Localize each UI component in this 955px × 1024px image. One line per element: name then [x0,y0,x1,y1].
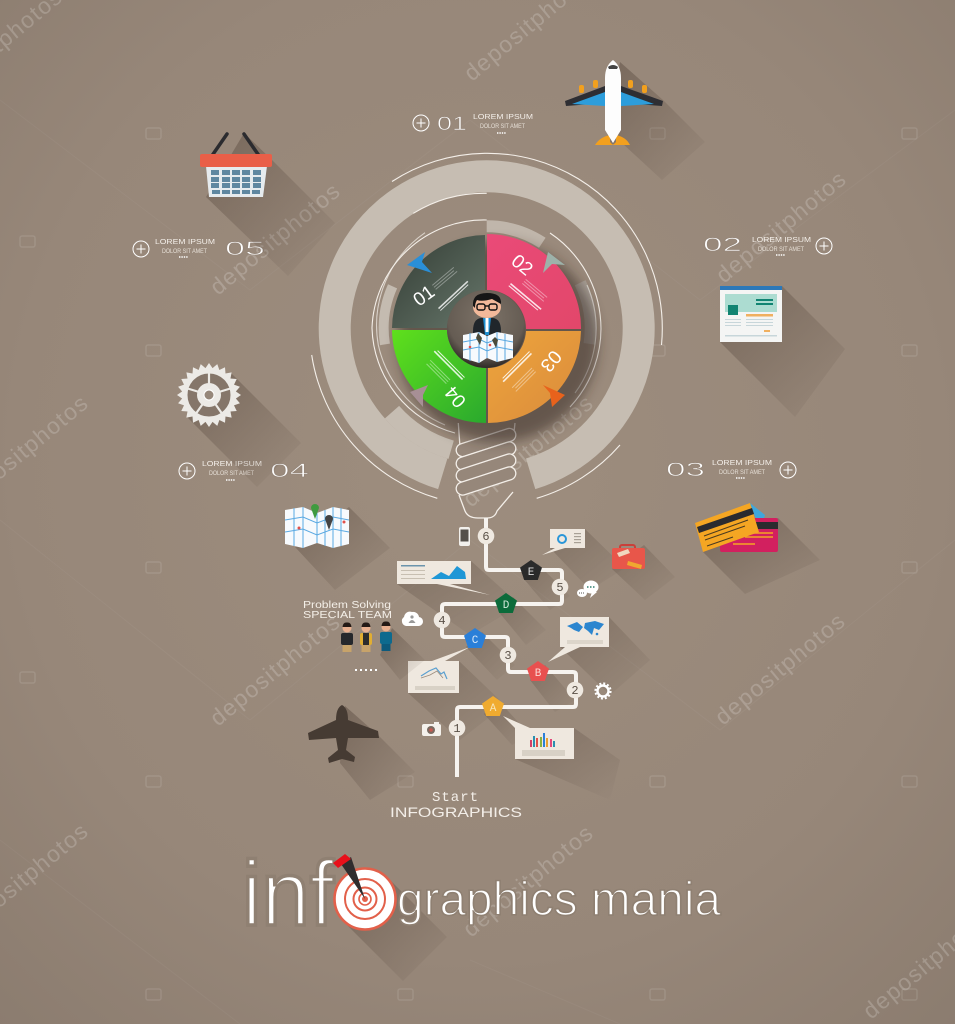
label 04: DOLOR SIT AMET [209,470,254,477]
label 01 [413,114,533,135]
step markers: 2 [571,684,579,698]
label 01: LOREM IPSUM [473,114,533,121]
title: inf [242,843,334,945]
icon: credit cards [695,503,820,594]
icon: gear [177,363,301,487]
label 01: 01 [437,114,467,135]
bulb graphic [312,153,662,518]
icon: shopping basket [200,133,335,276]
step markers: 1 [453,722,461,736]
step markers: 6 [482,530,490,544]
centre hole [447,290,525,368]
icon: gear small [595,683,611,699]
watermark: depositphotos [710,608,849,730]
info card: line chart [408,647,470,693]
icon: web page [720,286,845,417]
milestone pentagons: B [535,668,542,680]
bulb base [455,423,517,518]
team heading: SPECIAL TEAM [303,610,392,621]
team people [341,621,425,680]
team heading [303,600,392,621]
step markers [434,528,583,736]
watermark: depositphotos [711,166,850,288]
dots [355,669,378,671]
icon: camera [422,722,441,736]
icon: chat bubbles [577,580,598,598]
milestone pentagons: D [503,600,510,612]
label 05 [133,239,265,260]
start label: Start [432,790,478,806]
label 04 [179,461,310,482]
watermark: depositphotos [458,390,597,512]
title [242,843,722,981]
icon: airplane [565,60,705,180]
segment 01: 01 [410,282,439,311]
segment 03: 03 [536,346,565,375]
step markers: 4 [438,614,446,628]
label 04: LOREM IPSUM [202,461,262,468]
label 03: 03 [666,460,705,481]
label 02: LOREM IPSUM [752,237,811,244]
process route line [442,518,576,777]
thin arcs [312,153,662,498]
label 02 [703,235,832,256]
pie chart [392,234,598,442]
watermark: depositphotos [205,178,344,300]
icon: folded map [285,504,390,590]
icon: target with dart [333,854,396,930]
segment 03 [488,331,581,423]
info card: bar chart [503,716,574,759]
milestone pentagons [464,560,549,716]
label 05: LOREM IPSUM [155,239,215,246]
label 01: DOLOR SIT AMET [480,123,525,130]
watermark: depositphotos [205,609,344,731]
info card: world map [548,617,609,662]
segment 02: 02 [507,251,536,280]
arrow tabs [407,252,565,407]
milestone pentagons: A [490,703,497,715]
label 03 [666,460,796,481]
inner ring segments [379,220,597,459]
title: graphics mania [397,872,722,925]
route path shadows [397,529,675,800]
segment 02 [487,234,581,329]
team heading: Problem Solving [303,600,391,611]
label 05: DOLOR SIT AMET [162,248,207,255]
label 03: LOREM IPSUM [712,460,772,467]
man with map [463,293,513,363]
icon: phone [459,527,470,546]
info card: area chart [397,561,490,595]
label 02: DOLOR SIT AMET [758,246,804,253]
start label: INFOGRAPHICS [390,805,522,820]
label 05: 05 [225,239,265,260]
milestone pentagons: C [472,635,479,647]
segment 04: 04 [441,381,471,411]
label 02: 02 [703,235,742,256]
info card: ring chart [542,529,585,555]
milestone pentagons: E [528,567,535,579]
label 04: 04 [270,461,310,482]
step markers: 3 [504,649,512,663]
icon: plane silhouette [308,705,415,800]
icon: suitcase [612,545,645,569]
big ring [319,160,655,489]
icon: cloud [402,612,423,626]
segment 01 [392,235,485,328]
label 03: DOLOR SIT AMET [719,469,765,476]
start label [390,790,522,820]
watermark: depositphotos [458,820,597,942]
step markers: 5 [556,581,564,595]
segment 04 [392,330,486,423]
